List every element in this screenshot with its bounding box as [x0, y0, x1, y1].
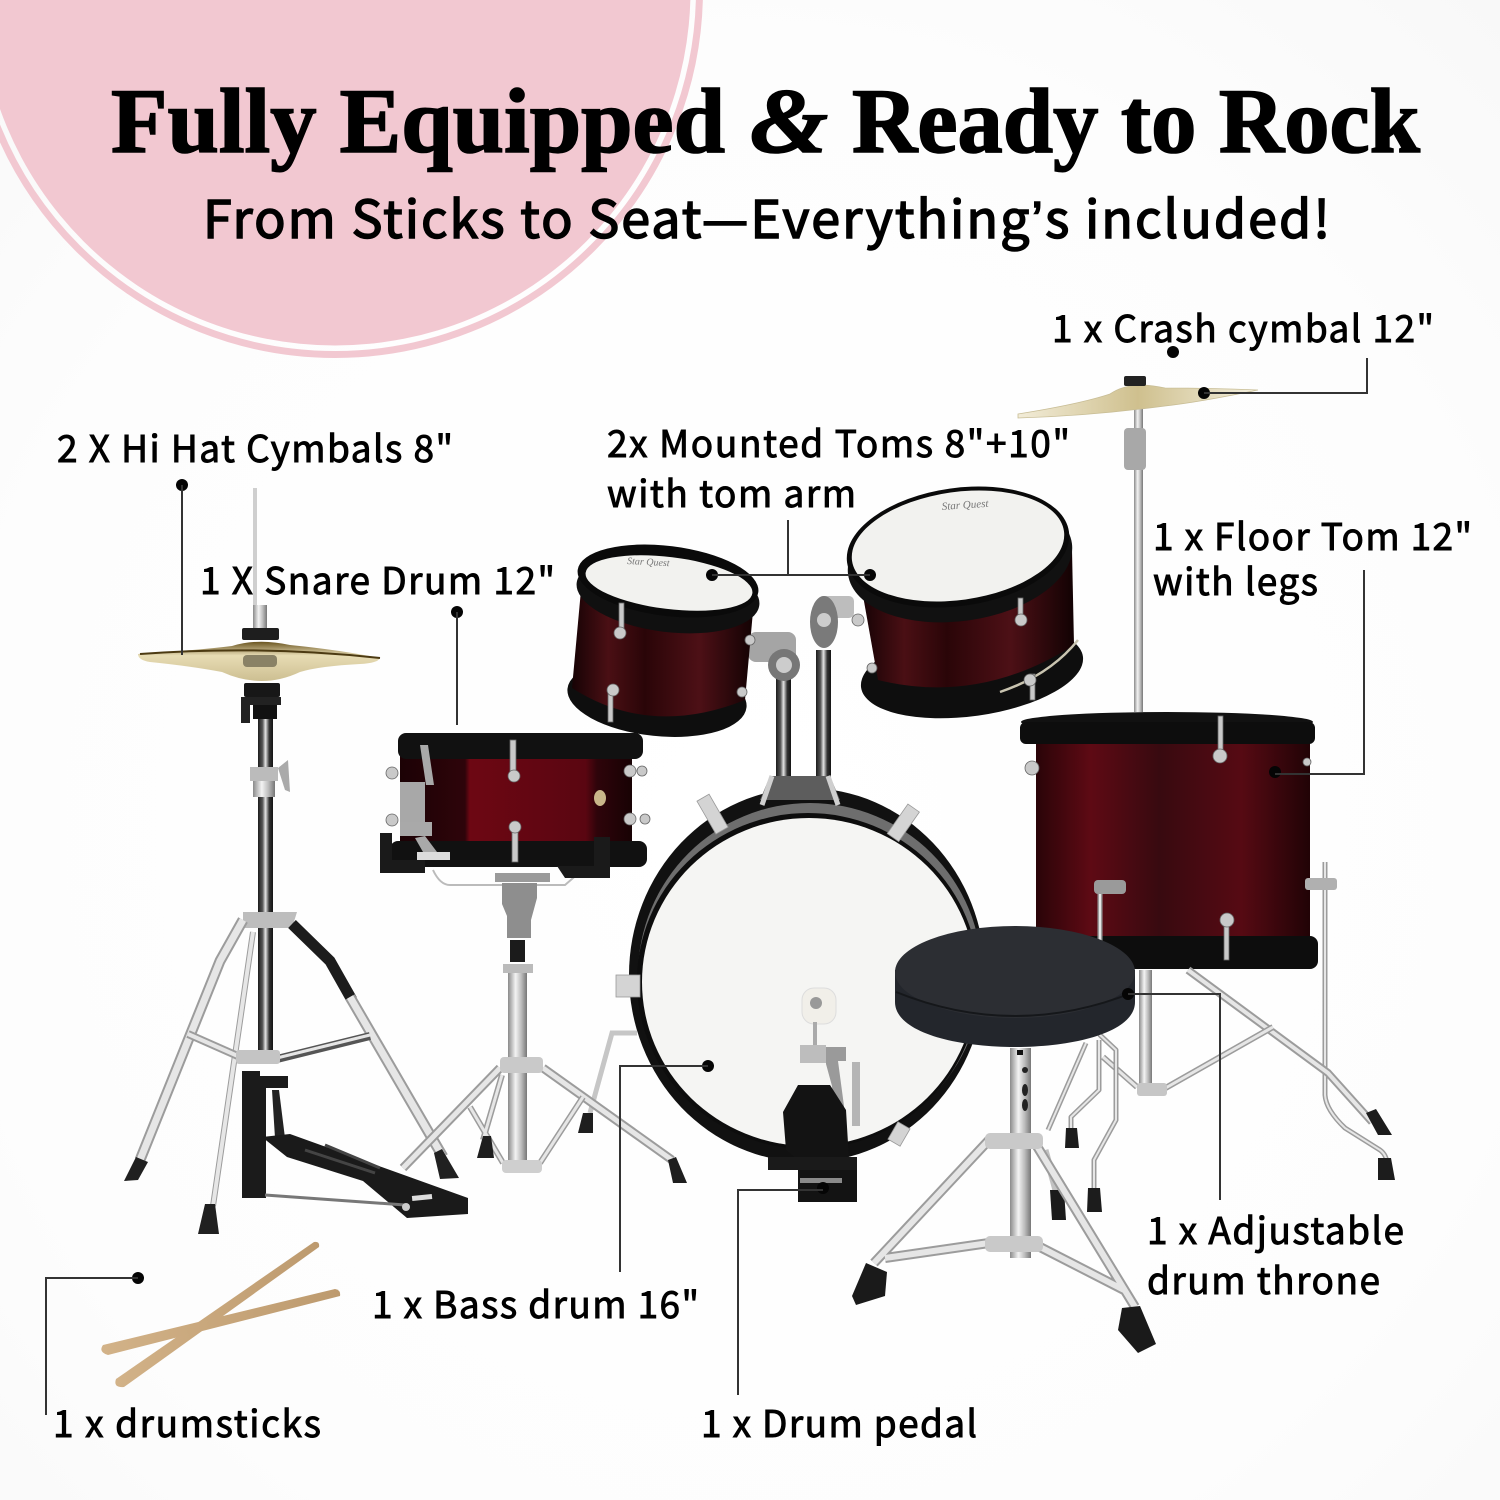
label: drum throne: 1 x Adjustable: [1147, 1201, 1404, 1255]
throne back leg: [1045, 1150, 1060, 1205]
bass drum claws: [616, 794, 919, 1146]
bass drum mount: [760, 776, 840, 800]
label: bass drum: [372, 1060, 714, 1329]
hi-hat feet: [124, 1149, 459, 1234]
hi-hat clamps: [250, 767, 278, 781]
snare stand: [433, 870, 580, 885]
right tom rim: [839, 482, 1081, 636]
snare shell: [400, 755, 632, 843]
title: [111, 70, 1421, 172]
title: Ready to Rock: [852, 70, 1421, 172]
label: snare drum: 1 X Snare Drum 12": [200, 551, 555, 605]
throne legs: [874, 1140, 1135, 1307]
left tom logo: Star Quest: [627, 556, 670, 569]
throne pole: [1010, 1048, 1031, 1258]
bass drum head: [642, 818, 976, 1146]
label: drumsticks: [46, 1272, 321, 1448]
floor tom bottom hoop: [1034, 936, 1318, 969]
bass drum hoop: [629, 788, 985, 1162]
drum pedal: [768, 988, 860, 1202]
right tom lugs: [852, 598, 1036, 700]
label: floor tom: [1153, 507, 1472, 778]
label: mounted toms: with tom arm: [607, 464, 856, 518]
subtitle: From Sticks to Seat—Everything’s included!: [203, 178, 1330, 253]
label: bass drum: 1 x Bass drum 16": [372, 1275, 699, 1329]
floor tom lugs: [1025, 716, 1311, 960]
floor tom legs: [1139, 970, 1152, 1090]
label: floor tom: with legs: [1153, 552, 1318, 606]
label: drum pedal: 1 x Drum pedal: [701, 1394, 977, 1448]
pedal beater: [802, 988, 836, 1024]
crash cymbal and stand: [1018, 376, 1258, 712]
hi-hat cymbals: [138, 642, 380, 681]
snare hoops: [398, 733, 643, 759]
label: drum throne: [1122, 988, 1404, 1305]
label: mounted toms: [607, 414, 1070, 581]
throne collars: [985, 1133, 1043, 1149]
title: &: [750, 70, 828, 172]
hi-hat stand pole: [258, 716, 273, 1063]
floor tom shell: [1036, 735, 1310, 947]
pedal spring assembly: [826, 1047, 846, 1136]
hi-hat legs: [140, 920, 243, 1160]
left tom shell: [572, 590, 754, 716]
label: floor tom: 1 x Floor Tom 12": [1153, 507, 1472, 561]
label: mounted toms: 2x Mounted Toms 8"+10": [607, 414, 1070, 468]
label: drum throne: drum throne: [1147, 1251, 1380, 1305]
floor tom top hoop: [1021, 712, 1313, 732]
hi-hat rod: [253, 488, 257, 613]
snare drum: [380, 733, 687, 1183]
title: Fully Equipped: [111, 70, 725, 172]
right tom bottom hoop: [855, 613, 1089, 731]
label: crash cymbal: 1 x Crash cymbal 12": [1052, 299, 1434, 353]
snare lugs: [386, 740, 650, 862]
left tom bottom hoop: [564, 651, 750, 745]
snare brackets: [380, 833, 425, 873]
right mounted tom: [839, 473, 1089, 731]
label: drum pedal: [701, 1182, 977, 1448]
snare strainer: [400, 782, 425, 824]
pedal body: [783, 1085, 857, 1202]
left mounted tom: [564, 535, 764, 745]
right tom head: [845, 478, 1071, 614]
label: snare drum: [200, 551, 555, 725]
hi-hat pedal: [242, 1071, 288, 1198]
drumsticks: [101, 1242, 340, 1387]
label: drumsticks: 1 x drumsticks: [53, 1394, 321, 1448]
label: crash cymbal: [1052, 299, 1434, 399]
tom arms: [748, 596, 854, 780]
label: hi-hat cymbals: 2 X Hi Hat Cymbals 8": [57, 419, 453, 473]
right tom logo: Star Quest: [941, 498, 990, 513]
throne seat side: [895, 970, 1135, 1047]
throne seat top: [895, 926, 1135, 1018]
right tom shell: [862, 550, 1074, 687]
snare badge: [594, 790, 606, 806]
throne feet: [852, 1263, 887, 1305]
bass drum: [616, 776, 985, 1162]
floor tom: [1020, 712, 1395, 1212]
label: hi-hat cymbals: [57, 419, 453, 655]
left tom lugs: [607, 603, 755, 722]
hi-hat stand and cymbals: [124, 488, 468, 1234]
left tom head: [582, 547, 756, 619]
drum throne: [852, 926, 1156, 1353]
pink circle: [0, 0, 700, 354]
left tom rim: [572, 545, 764, 643]
floor tom feet: [1065, 1109, 1395, 1212]
